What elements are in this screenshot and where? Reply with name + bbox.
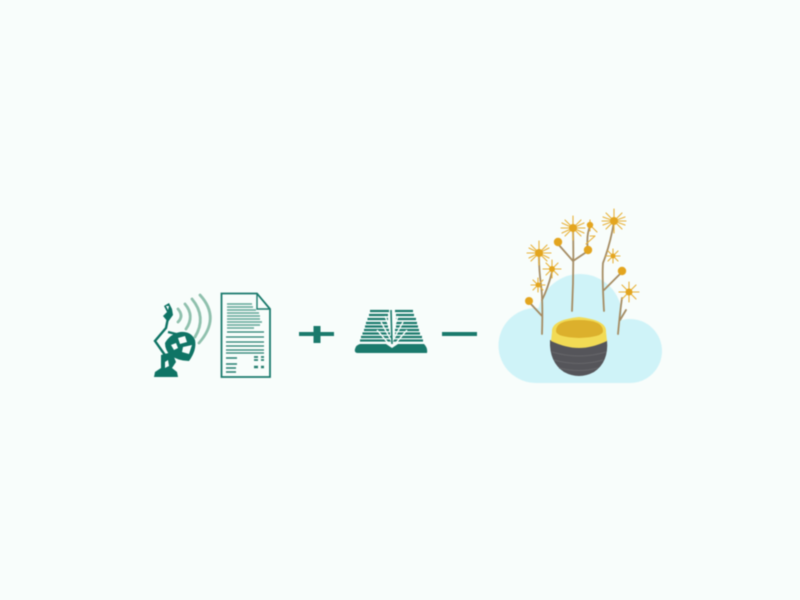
pot bowl <box>550 340 607 376</box>
folded corner <box>257 294 270 309</box>
icon: antenna with signal waves <box>154 295 210 377</box>
cloud <box>498 274 662 383</box>
spine leaf <box>377 316 407 344</box>
stems <box>530 222 626 334</box>
table rows <box>226 357 264 372</box>
text lines <box>227 304 262 328</box>
stripes <box>360 311 423 340</box>
base <box>355 344 427 353</box>
antenna arm <box>155 318 180 358</box>
icon: plus sign <box>299 326 334 343</box>
base <box>154 352 178 377</box>
signal waves <box>178 295 210 343</box>
icon: minus sign <box>442 332 477 336</box>
icon: open book with leaf <box>355 310 427 353</box>
icon: document <box>222 294 270 377</box>
rules <box>226 332 264 353</box>
flower bursts <box>527 209 639 302</box>
dish <box>165 332 195 361</box>
antenna tip <box>163 303 173 322</box>
flower centers <box>525 217 632 305</box>
page outline <box>222 294 270 377</box>
illustration: pot with flowers on cloud <box>498 209 662 383</box>
pot yellow band <box>551 317 607 348</box>
pot rim <box>556 320 603 338</box>
